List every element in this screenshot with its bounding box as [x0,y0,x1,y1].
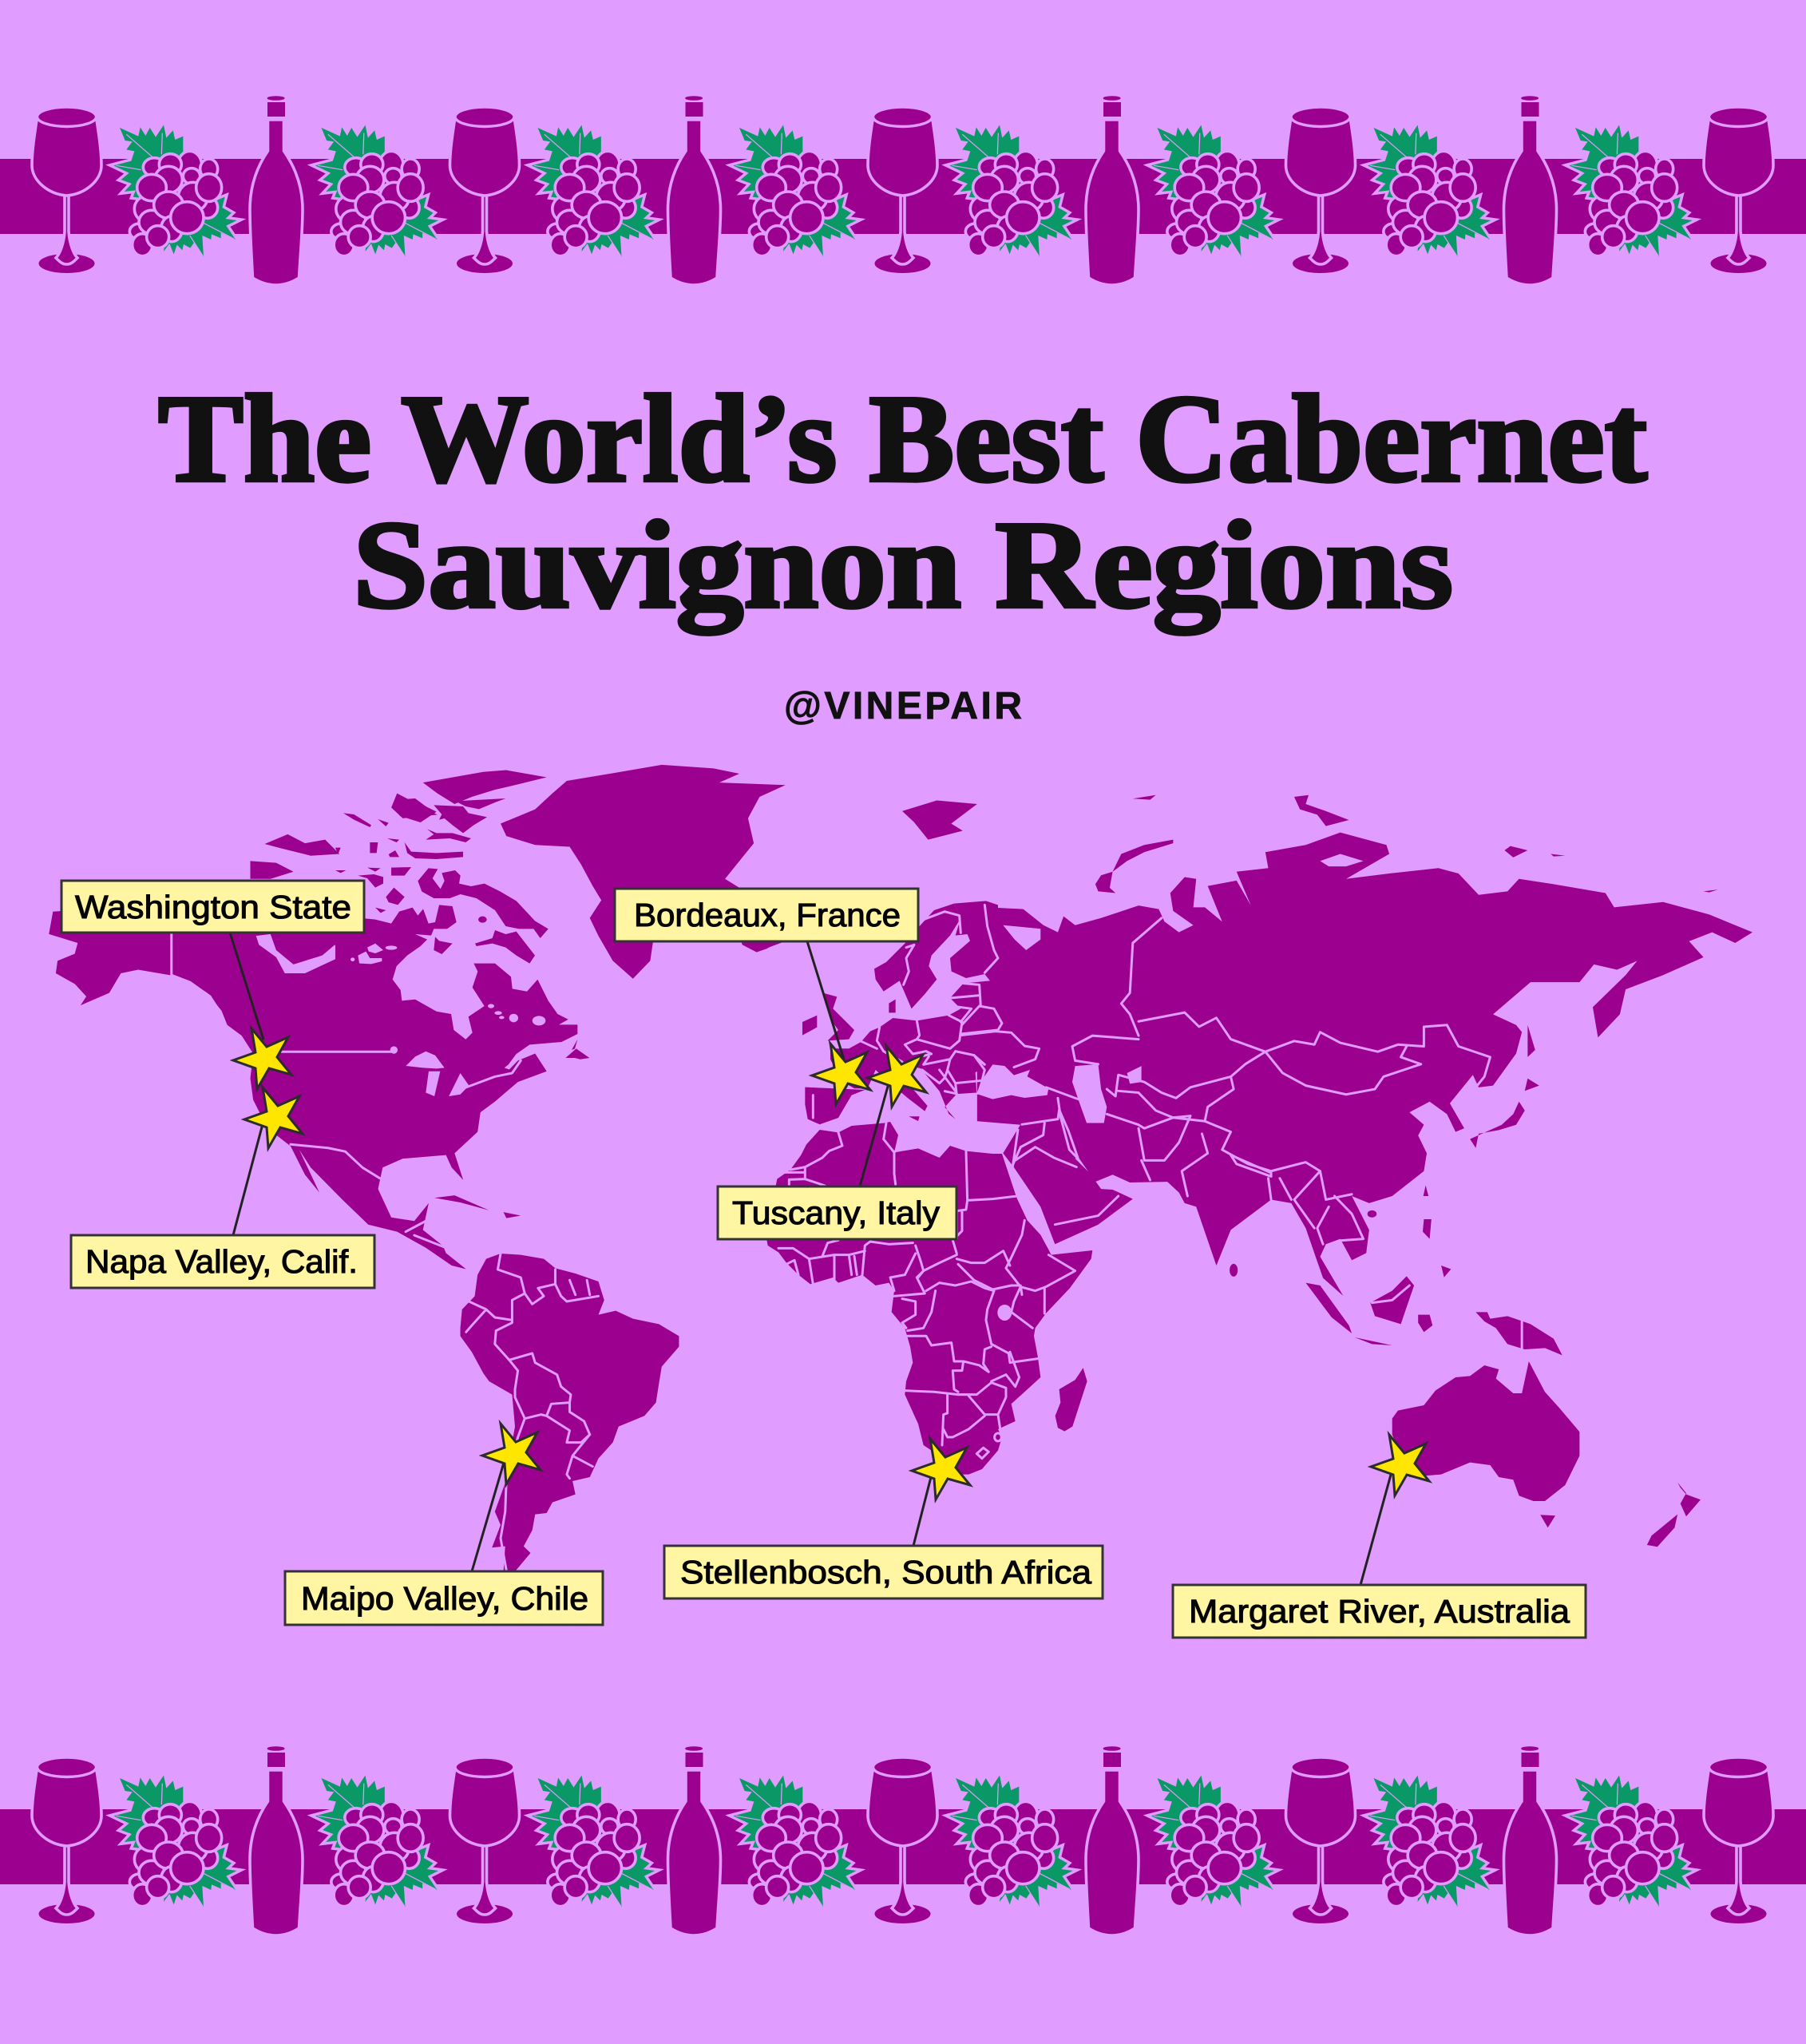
africa [764,1122,1092,1475]
title [158,369,1647,635]
europe and the middle east [758,901,1078,1168]
label: Bordeaux, France: Bordeaux, France [634,897,901,933]
leader lines [230,933,1391,1585]
label: Washington State [61,881,364,933]
north america and greenland [49,765,800,1270]
star markers [233,1028,1429,1499]
canada north and east with arctic islands [335,798,589,1075]
label: Maipo Valley, Chile [285,1571,603,1625]
label: Stellenbosch, South Africa: Stellenbosch, South Africa [680,1554,1091,1590]
label: Stellenbosch, South Africa [664,1546,1103,1598]
title: The World’s Best Cabernet [158,369,1647,508]
label: Bordeaux, France [615,889,918,941]
label: Washington State: Washington State [75,889,351,925]
world map [49,765,1753,1571]
label: Tuscany, Italy: Tuscany, Italy [732,1194,941,1231]
label: Margaret River, Australia: Margaret River, Australia [1189,1593,1570,1630]
byline: @VINEPAIR: @VINEPAIR [784,685,1022,727]
southeast asia and oceania [1305,1276,1701,1547]
label: Maipo Valley, Chile: Maipo Valley, Chile [301,1580,588,1617]
label: Napa Valley, Calif.: Napa Valley, Calif. [85,1243,358,1280]
label: Tuscany, Italy [718,1186,956,1239]
title: Sauvignon Regions [353,495,1453,635]
asia [902,795,1753,1296]
label: Margaret River, Australia [1173,1585,1586,1638]
south america [461,1254,679,1571]
bottom decorative band: wine glasses, grapes and bottles [0,1746,1806,1935]
top decorative band: wine glasses, grapes and bottles [0,96,1806,285]
label: Napa Valley, Calif. [71,1235,374,1288]
